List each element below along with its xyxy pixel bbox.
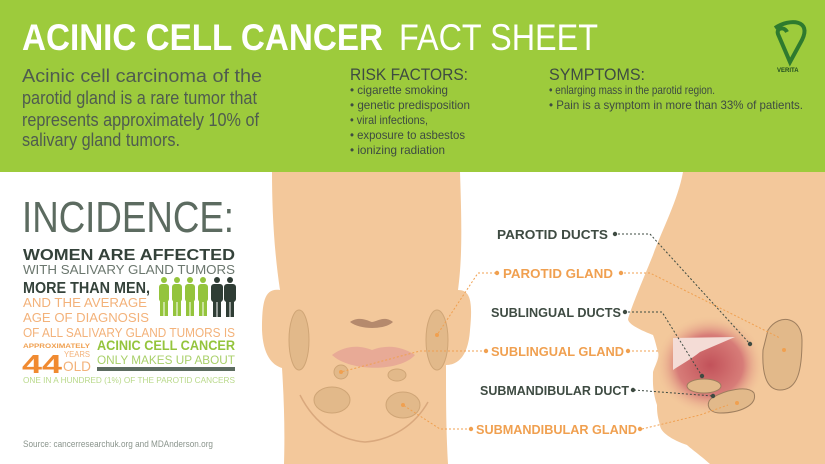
front face <box>262 172 471 464</box>
gland labels: PAROTID GLAND <box>503 266 613 281</box>
risk factors <box>350 65 470 157</box>
incidence text block: ACINIC CELL CANCER <box>97 338 235 353</box>
icon: people <box>159 277 236 317</box>
incidence text block: MORE THAN MEN, <box>23 280 150 297</box>
incidence text block: APPROXIMATELY <box>23 343 91 350</box>
incidence text block: OF ALL SALIVARY GLAND TUMORS IS <box>23 326 235 340</box>
logo: Verita <box>775 22 805 74</box>
incidence heading: INCIDENCE: <box>22 193 234 242</box>
incidence text block: AND THE AVERAGE <box>23 296 147 310</box>
intro text: salivary gland tumors. <box>22 130 180 150</box>
jaw line <box>300 395 428 442</box>
leader lines <box>341 234 780 429</box>
gland labels: SUBLINGUAL DUCTS <box>491 305 621 320</box>
title <box>22 17 598 58</box>
risk factors: • genetic predisposition <box>350 98 470 112</box>
incidence text block: OLD <box>63 358 91 374</box>
risk factors: • ionizing radiation <box>350 143 445 157</box>
risk factors: • viral infections, <box>350 113 428 127</box>
risk factors: • cigarette smoking <box>350 83 448 97</box>
gland labels: PAROTID DUCTS <box>497 227 608 242</box>
gland labels <box>476 227 637 437</box>
header panel <box>0 0 825 172</box>
symptoms <box>549 65 803 112</box>
gland labels: SUBMANDIBULAR GLAND <box>476 422 637 437</box>
parotid gland profile <box>763 319 802 390</box>
incidence text block: WITH SALIVARY GLAND TUMORS <box>23 263 235 277</box>
incidence text block <box>22 247 236 385</box>
sublingual gland profile <box>687 379 721 393</box>
intro text: represents approximately 10% of <box>22 110 260 130</box>
incidence text block: YEARS <box>64 350 90 359</box>
submandibular gland profile <box>708 389 755 413</box>
mouth interior <box>655 315 765 415</box>
logo: Verita: VERITA <box>777 68 799 74</box>
incidence text block: AGE OF DIAGNOSIS <box>23 311 149 325</box>
nose <box>350 319 393 328</box>
incidence text block: ONLY MAKES UP ABOUT <box>97 353 236 367</box>
symptoms: • enlarging mass in the parotid region. <box>549 83 715 97</box>
incidence text block: ONE IN A HUNDRED (1%) OF THE PAROTID CANCERS <box>23 375 235 385</box>
title: ACINIC CELL CANCER <box>22 17 383 58</box>
intro text <box>22 66 262 150</box>
title: FACT SHEET <box>399 17 598 58</box>
glands front <box>289 310 448 418</box>
symptoms: SYMPTOMS: <box>549 65 645 84</box>
incidence text block: WOMEN ARE AFFECTED <box>23 247 235 264</box>
profile face <box>628 172 825 464</box>
risk factors: RISK FACTORS: <box>350 65 468 84</box>
intro text: parotid gland is a rare tumor that <box>22 88 257 108</box>
gland labels: SUBLINGUAL GLAND <box>491 344 624 359</box>
incidence text block: 44 <box>22 349 63 379</box>
gland labels: SUBMANDIBULAR DUCT <box>480 383 629 398</box>
label dots <box>339 232 786 431</box>
source: Source: cancerresearchuk.org and MDAnderson.org <box>23 439 213 450</box>
risk factors: • exposure to asbestos <box>350 128 465 142</box>
lips <box>332 347 415 368</box>
symptoms: • Pain is a symptom in more than 33% of patients. <box>549 98 803 112</box>
intro text: Acinic cell carcinoma of the <box>22 66 262 86</box>
